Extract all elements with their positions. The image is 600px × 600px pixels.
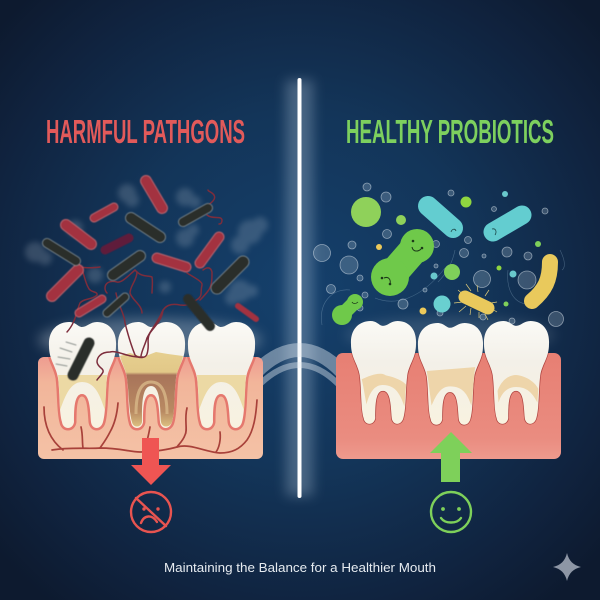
gum block	[38, 357, 263, 459]
panel: healthy teeth and gum	[336, 317, 561, 459]
panel: diseased teeth and gum	[38, 318, 263, 459]
bacterium: cyan right	[492, 215, 522, 235]
bubbles: probiotic side	[314, 183, 564, 326]
connector: translucent arcs between gums	[256, 350, 342, 388]
bacterium: cyan left	[428, 206, 456, 232]
smoke clouds: harmful side	[25, 184, 268, 305]
dark bacteria	[47, 208, 243, 375]
tooth: decayed centre	[118, 322, 185, 428]
caption: Maintaining the Balance for a Healthier Mouth	[164, 560, 436, 575]
icon: sparkle star	[553, 553, 581, 581]
gum pockets	[351, 353, 549, 426]
tooth: right	[188, 322, 255, 428]
bacterium: yellow spiky	[454, 284, 497, 320]
tooth: left	[351, 321, 416, 424]
bacteria: harmful pathogens	[47, 181, 256, 375]
tooth: centre	[418, 323, 483, 425]
orbit lines	[321, 250, 564, 325]
tooth: right	[484, 321, 549, 424]
gum pockets	[48, 357, 256, 430]
bacteria tendrils	[67, 190, 222, 380]
icon: sad face crossed out	[131, 492, 171, 532]
probiotic circles: green, cyan, yellow	[351, 191, 541, 314]
red bacteria	[52, 181, 256, 319]
arrow: red down	[131, 438, 171, 485]
gum block	[336, 353, 561, 459]
bacterium: yellow curved	[532, 262, 550, 301]
arrow: green up	[430, 432, 472, 482]
bacterium: small green	[332, 294, 363, 325]
icon: smiling face	[431, 492, 471, 532]
tooth: left, with bacterium	[49, 322, 116, 428]
heading: harmful pathogens: HARMFUL PATHGONS	[46, 113, 245, 150]
bacterium: big green	[371, 229, 434, 296]
gum veins	[44, 400, 257, 453]
divider: glowing vertical line	[286, 78, 313, 498]
